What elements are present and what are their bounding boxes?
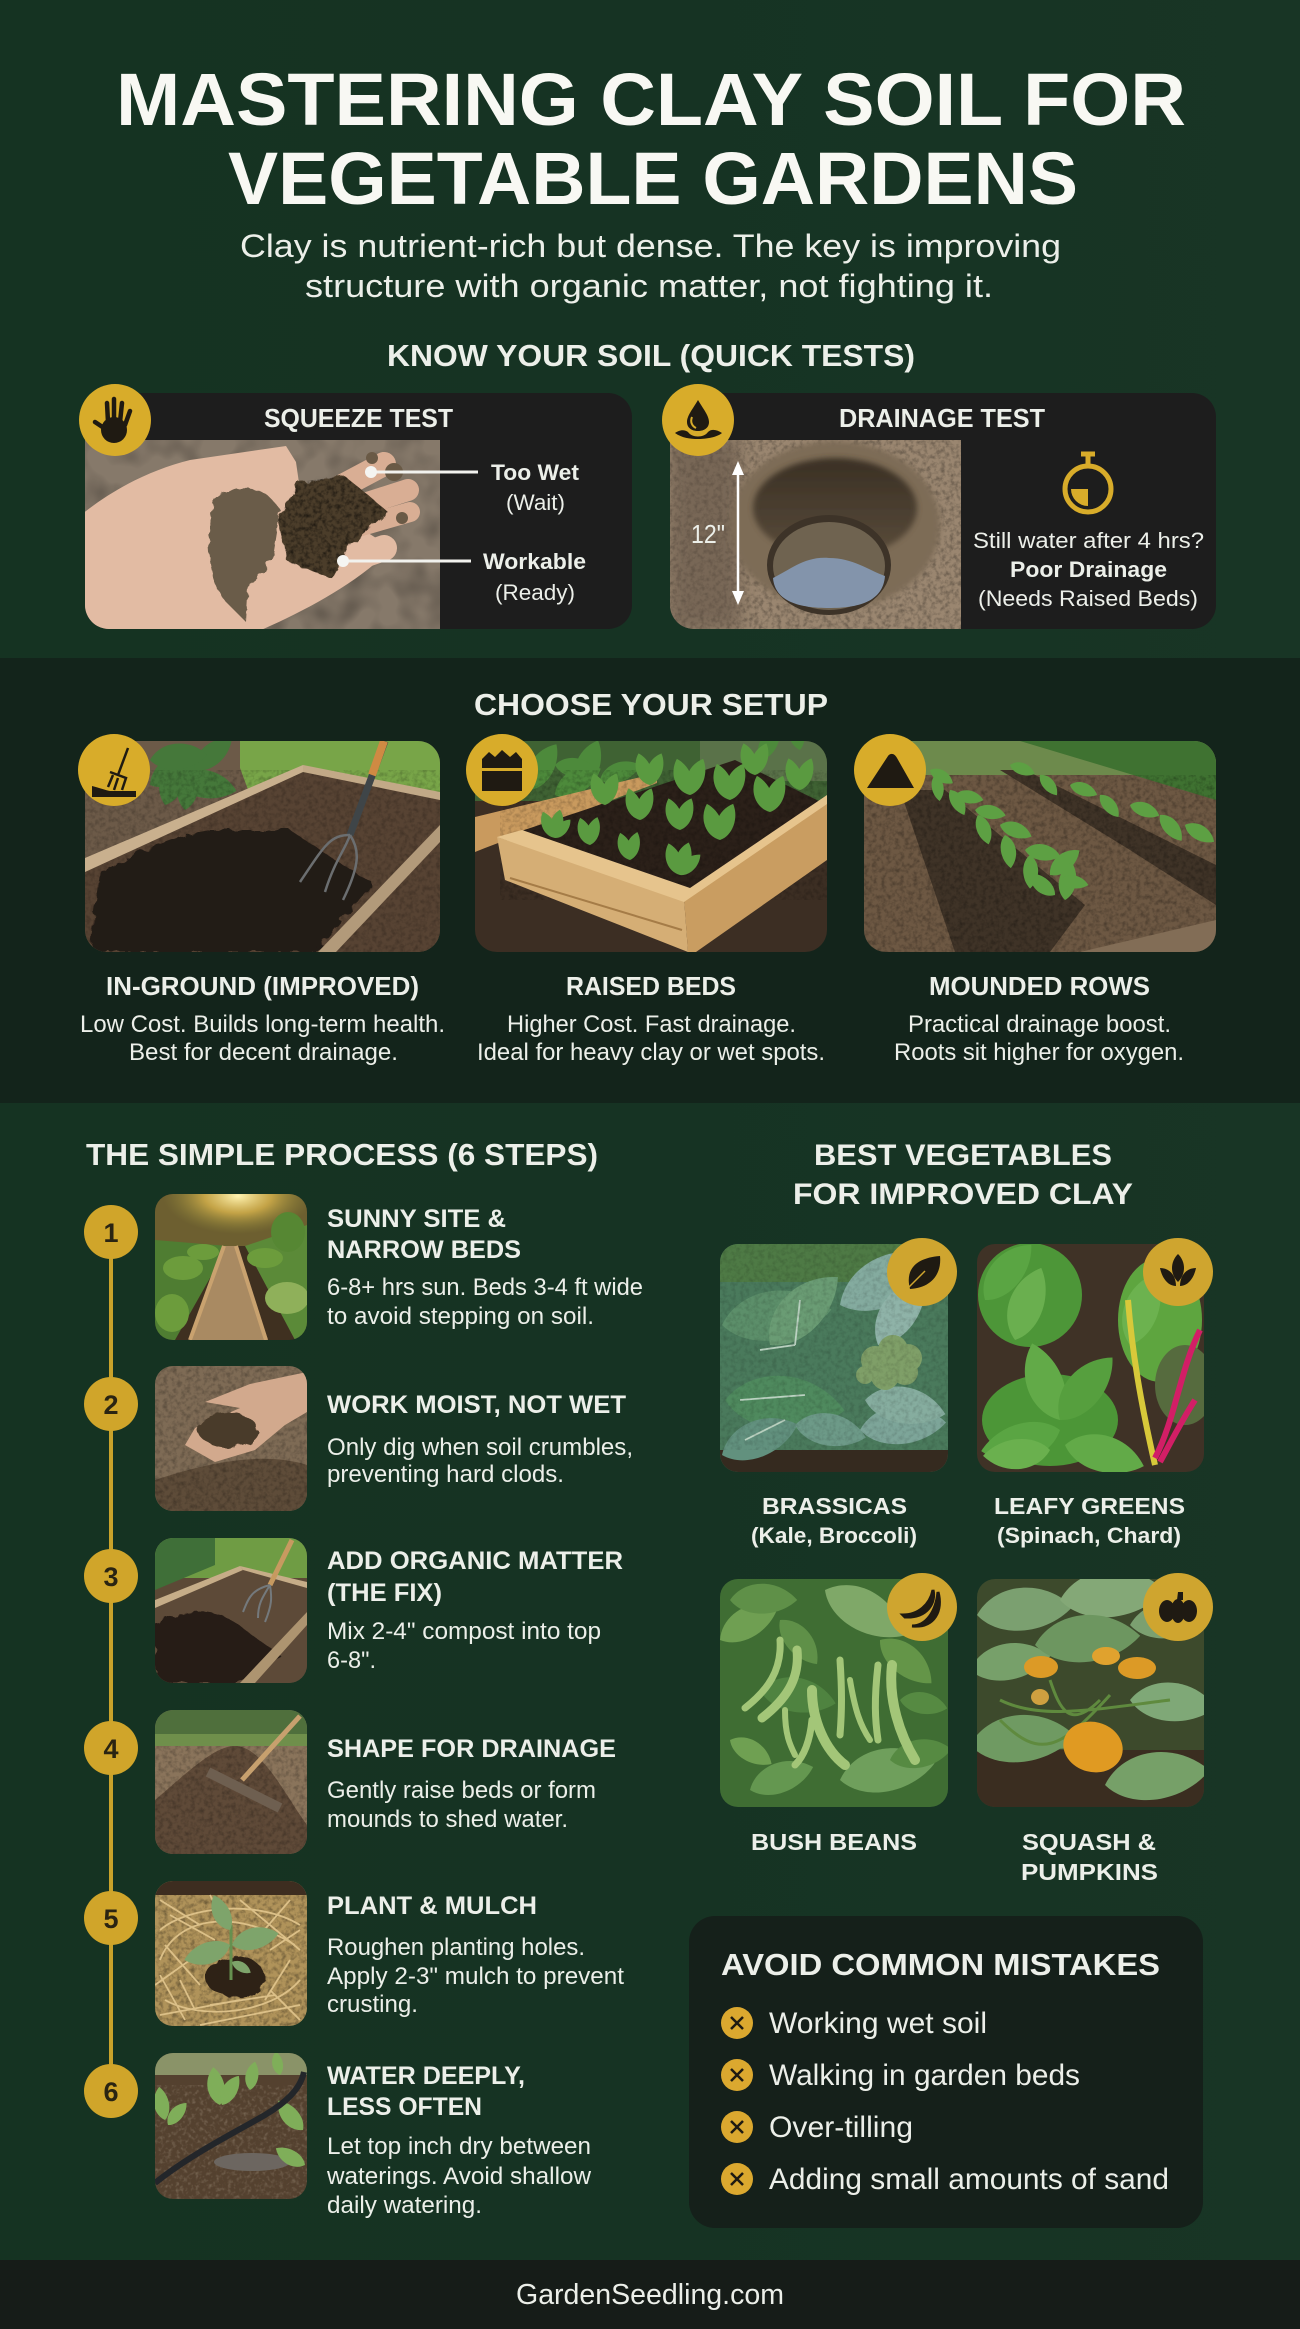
- number badge 6: 6: [103, 2077, 119, 2107]
- photo: seedling in straw mulch: [155, 1881, 307, 2026]
- heading: mistakes: AVOID COMMON MISTAKES: [721, 1947, 1160, 1982]
- text: step 2: preventing hard clods.: [327, 1461, 564, 1488]
- label: in-ground: Low Cost. Builds long-term health.: [80, 1011, 445, 1038]
- photo: hand with crumbly soil: [155, 1366, 307, 1511]
- text: step 5: crusting.: [327, 1991, 418, 2018]
- label: squash and pumpkins: SQUASH &: [1022, 1829, 1156, 1855]
- item: walking in garden beds: Walking in garden beds: [769, 2059, 1080, 2092]
- panel: drainage test: [662, 384, 1216, 629]
- label: mounded rows: Practical drainage boost.: [908, 1011, 1171, 1038]
- photo: compost and fork: [155, 1538, 307, 1683]
- text: step 4: SHAPE FOR DRAINAGE: [327, 1735, 616, 1763]
- icon: leaf: [887, 1238, 957, 1306]
- text: step 3: [327, 1547, 623, 1674]
- text: step 1: SUNNY SITE &: [327, 1205, 506, 1233]
- label: raised beds: [477, 971, 825, 1066]
- item: over-tilling: Over-tilling: [769, 2111, 913, 2144]
- timeline line: [109, 1232, 113, 2091]
- photo: kale and broccoli: [715, 1234, 950, 1472]
- text: step 4: mounds to shed water.: [327, 1806, 568, 1833]
- label: mounded rows: MOUNDED ROWS: [929, 971, 1150, 1001]
- step 3: [84, 1538, 623, 1683]
- label: in-ground: IN-GROUND (IMPROVED): [106, 971, 419, 1001]
- heading: best vegetables: FOR IMPROVED CLAY: [793, 1178, 1133, 1211]
- heading: squeeze test: SQUEEZE TEST: [264, 403, 453, 433]
- icon: garden fork: [78, 734, 150, 806]
- text: step 5: Roughen planting holes.: [327, 1934, 585, 1961]
- label: raised beds: Ideal for heavy clay or wet spots.: [477, 1039, 825, 1066]
- text: step 6: [326, 2062, 592, 2219]
- panel: mounded rows: [854, 734, 1218, 1066]
- item: working wet soil: Working wet soil: [769, 2007, 987, 2040]
- text: step 3: ADD ORGANIC MATTER: [327, 1547, 623, 1575]
- label: mounded rows: Roots sit higher for oxygen.: [894, 1039, 1184, 1066]
- vegetable: bush beans: [712, 1571, 957, 1855]
- text: step 6: LESS OFTEN: [327, 2093, 482, 2121]
- footer text: GardenSeedling.com: [516, 2279, 784, 2311]
- label: brassicas: (Kale, Broccoli): [751, 1523, 917, 1548]
- icon: pumpkin: [1143, 1573, 1213, 1641]
- text: step 2: [327, 1391, 633, 1488]
- heading: the simple process: THE SIMPLE PROCESS (6 STEPS): [86, 1137, 598, 1172]
- step 2: [84, 1366, 633, 1511]
- callout: too wet: Too Wet: [491, 460, 580, 485]
- text: step 3: Mix 2-4" compost into top: [327, 1618, 601, 1645]
- vegetable: leafy greens: [972, 1234, 1215, 1548]
- panel: raised beds: [466, 716, 827, 1066]
- text: step 5: PLANT & MULCH: [327, 1892, 537, 1920]
- step 5: [84, 1881, 624, 2026]
- heading: drainage test: DRAINAGE TEST: [839, 403, 1045, 433]
- photo: bean plants: [712, 1571, 954, 1807]
- text: step 1: 6-8+ hrs sun. Beds 3-4 ft wide: [327, 1274, 643, 1301]
- label: leafy greens: (Spinach, Chard): [997, 1523, 1181, 1548]
- label: leafy greens: LEAFY GREENS: [994, 1493, 1185, 1519]
- label: brassicas: [751, 1493, 917, 1548]
- step 6: [84, 2051, 592, 2219]
- footer band: [0, 2260, 1300, 2329]
- subtitle: [240, 228, 1061, 304]
- text: drainage result: Still water after 4 hrs?: [973, 528, 1204, 553]
- text: step 1: NARROW BEDS: [327, 1236, 521, 1264]
- label: in-ground: Best for decent drainage.: [129, 1039, 398, 1066]
- text: step 6: daily watering.: [327, 2192, 482, 2219]
- text: step 4: [327, 1735, 616, 1833]
- number badge 6: [84, 2064, 138, 2118]
- subtitle: Clay is nutrient-rich but dense. The key is improving: [240, 228, 1061, 264]
- title: VEGETABLE GARDENS: [228, 137, 1078, 220]
- text: step 6: Let top inch dry between: [327, 2133, 591, 2160]
- item: adding sand: Adding small amounts of sand: [769, 2163, 1169, 2196]
- vegetable: brassicas: [715, 1234, 957, 1548]
- heading: best vegetables: [793, 1139, 1133, 1211]
- title: [116, 58, 1186, 220]
- callout: too wet: [365, 460, 580, 515]
- text: step 4: Gently raise beds or form: [327, 1777, 596, 1804]
- callout: workable: Workable: [483, 549, 586, 574]
- text: step 3: (THE FIX): [327, 1579, 442, 1607]
- number badge 5: [84, 1891, 138, 1945]
- vegetable: squash and pumpkins: [967, 1565, 1218, 1885]
- number badge 3: 3: [103, 1562, 119, 1592]
- number badge 1: 1: [103, 1218, 119, 1248]
- label: leafy greens: [994, 1493, 1185, 1548]
- number badge 2: 2: [103, 1390, 119, 1420]
- text: step 5: [327, 1892, 624, 2018]
- heading: best vegetables: BEST VEGETABLES: [814, 1139, 1112, 1172]
- text: step 6: WATER DEEPLY,: [327, 2062, 525, 2090]
- icon: soil mound: [854, 734, 926, 806]
- label: brassicas: BRASSICAS: [762, 1493, 907, 1519]
- subtitle: structure with organic matter, not fighting it.: [305, 268, 993, 304]
- number badge 3: [84, 1549, 138, 1603]
- photo: drip irrigation: [151, 2051, 309, 2199]
- text: drainage result: [973, 528, 1204, 611]
- photo: spinach and chard: [977, 1244, 1204, 1472]
- text: step 1: to avoid stepping on soil.: [327, 1303, 594, 1330]
- icon: raised bed: [466, 734, 538, 806]
- band: choose your setup: [0, 658, 1300, 1103]
- icon: water drop: [662, 384, 734, 456]
- number badge 5: 5: [103, 1904, 119, 1934]
- text: drainage result: (Needs Raised Beds): [978, 586, 1198, 611]
- photo: raking a mound: [155, 1710, 307, 1854]
- panel: avoid common mistakes: [689, 1916, 1203, 2228]
- panel: in-ground: [78, 730, 445, 1066]
- icon: sprout: [1143, 1238, 1213, 1306]
- text: step 1: [327, 1205, 643, 1330]
- callout: too wet: (Wait): [506, 490, 565, 515]
- photo: wooden raised bed: [475, 741, 827, 952]
- label: bush beans: BUSH BEANS: [751, 1829, 917, 1855]
- callout: workable: [337, 549, 586, 605]
- heading: know your soil: KNOW YOUR SOIL (QUICK TESTS): [387, 338, 915, 373]
- photo: squash patch: [977, 1579, 1204, 1807]
- icon: stopwatch: [1065, 454, 1111, 512]
- photo: sunny narrow beds: [155, 1194, 307, 1340]
- arrow: 12 inch depth: 12": [691, 519, 725, 549]
- text: step 2: WORK MOIST, NOT WET: [327, 1391, 626, 1419]
- text: step 5: Apply 2-3" mulch to prevent: [327, 1963, 624, 1990]
- label: squash and pumpkins: [1021, 1829, 1158, 1885]
- text: drainage result: Poor Drainage: [1010, 557, 1167, 582]
- label: raised beds: RAISED BEDS: [566, 971, 736, 1001]
- label: squash and pumpkins: PUMPKINS: [1021, 1859, 1158, 1885]
- photo: improved in-ground bed: [85, 730, 440, 952]
- number badge 2: [84, 1377, 138, 1431]
- number badge 1: [84, 1205, 138, 1259]
- number badge 4: 4: [103, 1734, 119, 1764]
- text: step 3: 6-8".: [327, 1647, 376, 1674]
- text: step 2: Only dig when soil crumbles,: [327, 1434, 633, 1461]
- number badge 4: [84, 1721, 138, 1775]
- panel: squeeze test: [75, 384, 632, 640]
- text: step 6: waterings. Avoid shallow: [326, 2163, 592, 2190]
- photo: mounded rows: [864, 741, 1218, 952]
- photo: hand holding clay soil: [75, 440, 440, 640]
- label: in-ground: [80, 971, 445, 1066]
- step 1: [84, 1194, 642, 1340]
- icon: hand: [79, 384, 151, 456]
- photo: test hole with water: [670, 440, 961, 629]
- heading: choose your setup: CHOOSE YOUR SETUP: [474, 687, 828, 722]
- label: mounded rows: [894, 971, 1184, 1066]
- label: raised beds: Higher Cost. Fast drainage.: [507, 1011, 796, 1038]
- title: MASTERING CLAY SOIL FOR: [116, 58, 1186, 141]
- arrow: 12 inch depth: [691, 461, 744, 605]
- callout: workable: (Ready): [495, 580, 575, 605]
- icon: bean pods: [887, 1573, 957, 1641]
- step 4: [84, 1710, 616, 1854]
